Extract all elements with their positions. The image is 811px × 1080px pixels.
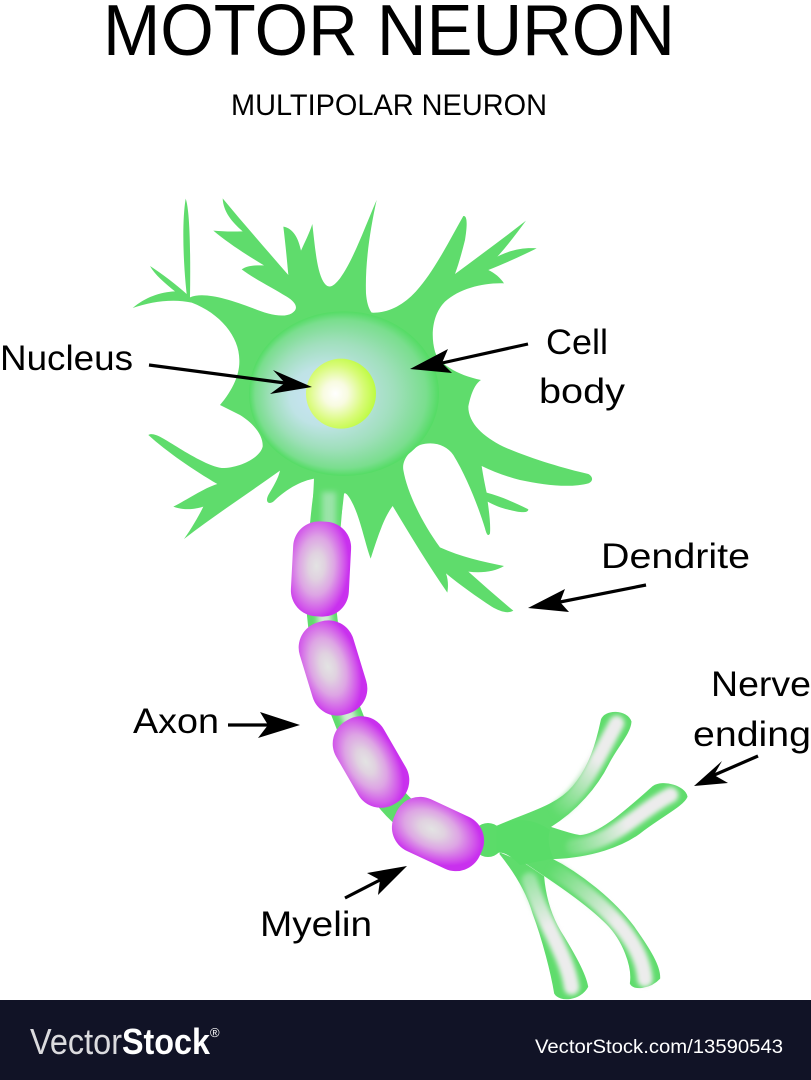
label: Dendrite: Dendrite <box>601 537 750 576</box>
myelin segment 1 <box>290 520 352 618</box>
branch 2 <box>513 784 687 863</box>
label: Nerve ending: ending <box>693 715 811 754</box>
label: Cell body <box>539 323 626 411</box>
footer logo: Vector <box>30 1021 122 1062</box>
label: Axon: Axon <box>133 702 219 741</box>
footer logo: ® <box>210 1025 220 1040</box>
subtitle: MULTIPOLAR NEURON <box>231 89 547 122</box>
nucleus <box>306 359 376 429</box>
myelin sheath segments <box>290 520 493 880</box>
label: Nerve ending <box>693 665 811 754</box>
axon stalk highlight <box>322 492 336 532</box>
label: Nerve ending: Nerve <box>711 665 811 704</box>
footer logo <box>30 1021 220 1062</box>
label: Myelin: Myelin <box>260 905 372 944</box>
label: Nucleus: Nucleus <box>0 339 133 378</box>
footer image id: VectorStock.com/13590543 <box>535 1037 783 1058</box>
branch 3 <box>527 858 659 987</box>
arrow: dendrite <box>528 585 646 612</box>
footer logo: Stock <box>122 1021 211 1062</box>
nerve endings <box>497 713 687 998</box>
label: Cell body: Cell <box>546 323 608 362</box>
arrow: myelin <box>345 866 407 898</box>
soma with dendrites <box>133 198 592 612</box>
neuron diagram <box>133 198 687 998</box>
arrow: axon <box>228 712 300 738</box>
arrow: cell body <box>410 344 528 373</box>
cell body <box>249 311 439 476</box>
myelin segment 3 <box>323 707 419 817</box>
footer bar <box>0 1000 811 1080</box>
arrow: nerve ending <box>694 756 758 786</box>
branch 1 <box>497 713 631 827</box>
myelin segment 4 <box>383 788 493 880</box>
axon <box>321 478 504 857</box>
label: Cell body: body <box>539 372 626 411</box>
myelin segment 2 <box>292 614 374 722</box>
arrow: nucleus <box>149 365 312 394</box>
terminal hub <box>497 820 553 865</box>
branch 4 <box>500 853 587 998</box>
